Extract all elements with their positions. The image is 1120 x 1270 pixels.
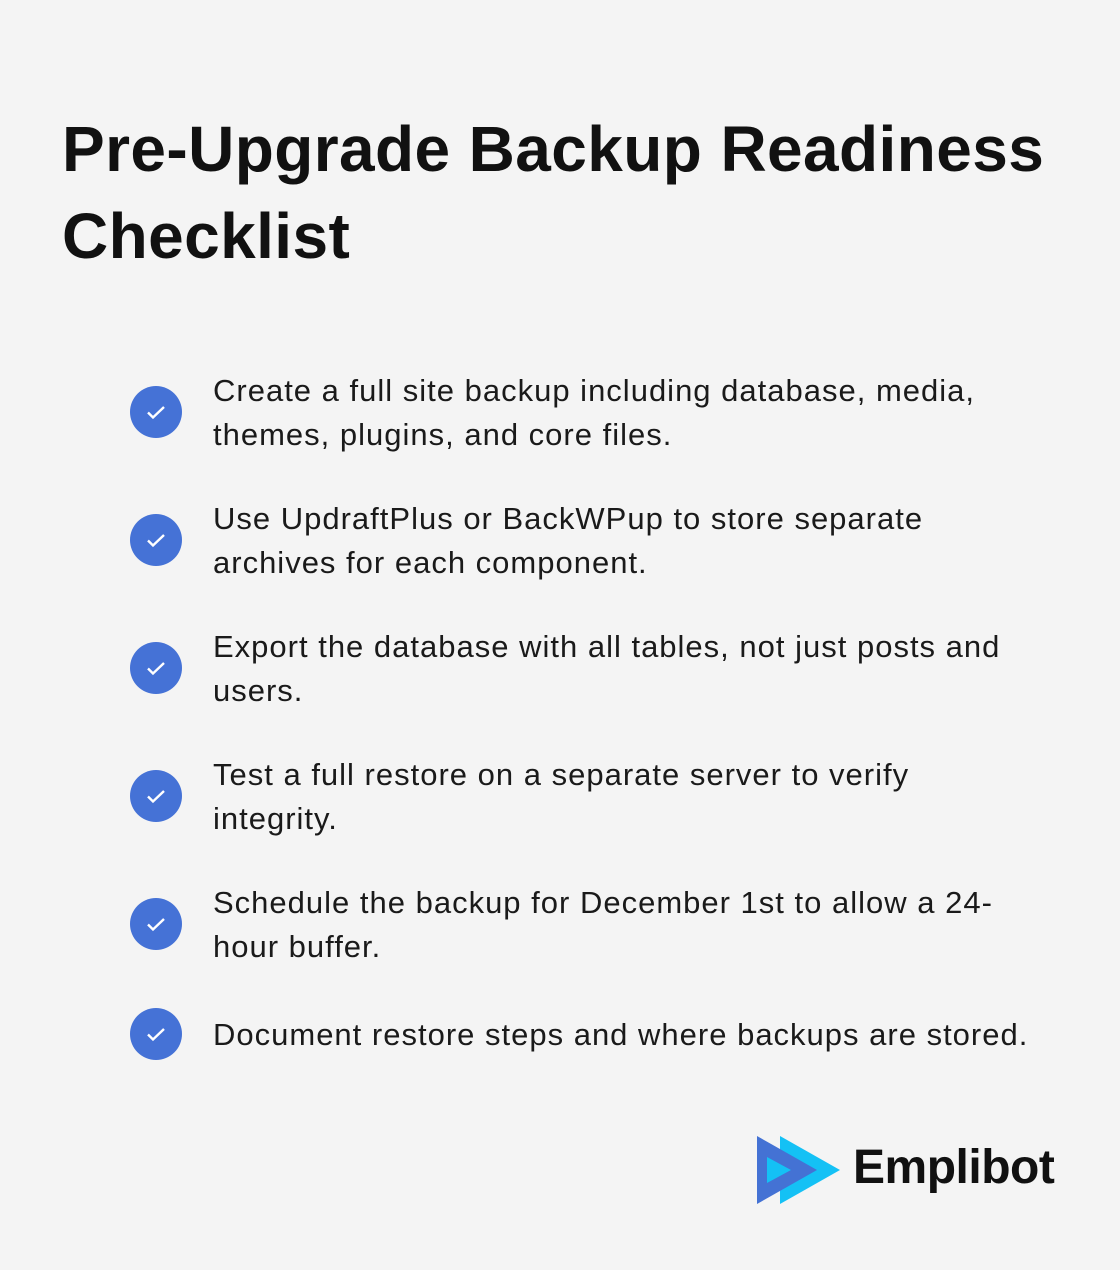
text: integrity. — [213, 801, 338, 836]
text — [213, 373, 975, 452]
text — [213, 629, 1000, 708]
text: Document restore steps and where backups are stored. — [213, 1017, 1028, 1052]
text: Use UpdraftPlus or BackWPup to store separate — [213, 501, 923, 536]
item 1 — [130, 373, 975, 452]
text — [213, 757, 909, 836]
text: hour buffer. — [213, 929, 381, 964]
logo — [757, 1136, 1054, 1204]
text: themes, plugins, and core files. — [213, 417, 672, 452]
item 6 — [130, 1008, 1028, 1060]
icon: check — [130, 1008, 182, 1060]
item 4 — [130, 757, 909, 836]
icon: logo mark — [757, 1136, 840, 1204]
text: Export the database with all tables, not just posts and — [213, 629, 1000, 664]
icon: check — [130, 514, 182, 566]
text: Test a full restore on a separate server to verify — [213, 757, 909, 792]
title: Checklist — [62, 200, 350, 272]
text — [213, 885, 993, 964]
item 3 — [130, 629, 1000, 708]
title — [62, 113, 1044, 272]
text: users. — [213, 673, 303, 708]
item 5 — [130, 885, 993, 964]
text — [213, 501, 923, 580]
icon: check — [130, 386, 182, 438]
text: Create a full site backup including database, media, — [213, 373, 975, 408]
logo text: Emplibot — [853, 1141, 1054, 1194]
icon: check — [130, 898, 182, 950]
text: Schedule the backup for December 1st to allow a 24- — [213, 885, 993, 920]
icon: check — [130, 770, 182, 822]
title: Pre-Upgrade Backup Readiness — [62, 113, 1044, 185]
item 2 — [130, 501, 923, 580]
icon: check — [130, 642, 182, 694]
text: archives for each component. — [213, 545, 648, 580]
